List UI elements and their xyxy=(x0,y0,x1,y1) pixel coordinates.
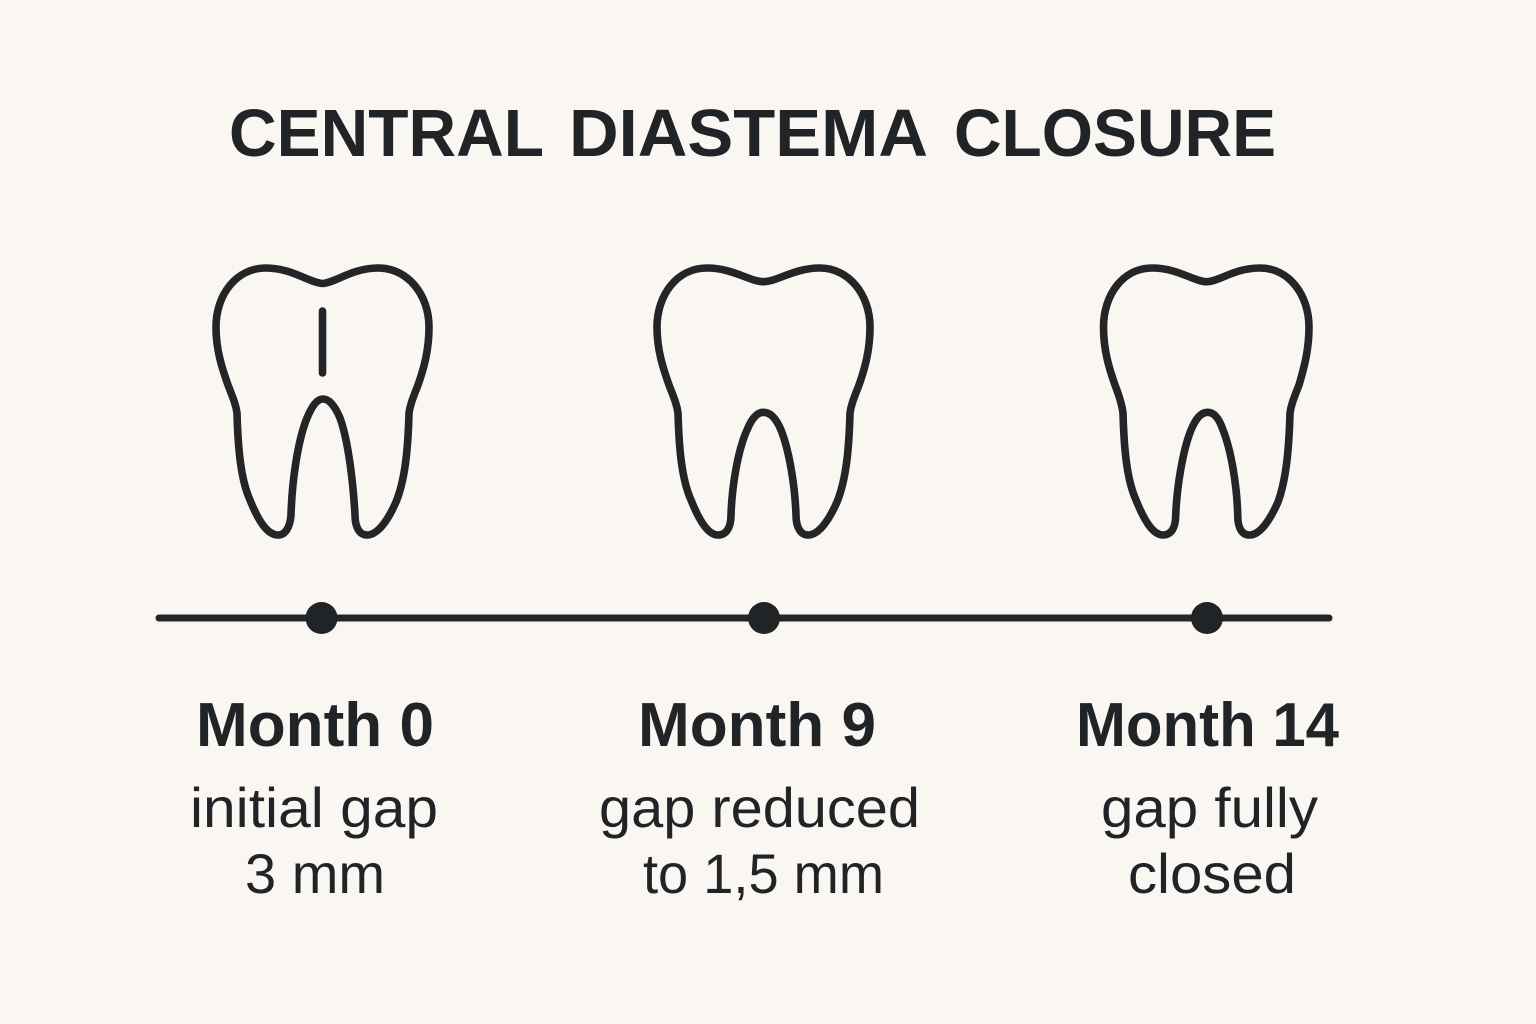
description: 3 mm: 3 mm xyxy=(245,842,385,905)
heading: month 0: Month 0 xyxy=(196,691,434,760)
icon: tooth at month 9 xyxy=(657,268,870,535)
icon: tooth at month 14 xyxy=(1104,268,1309,535)
label block: month 14 xyxy=(1076,691,1339,905)
title xyxy=(229,96,1276,171)
description: to 1,5 mm: to 1,5 mm xyxy=(643,842,884,905)
description: gap fully: gap fully xyxy=(1101,776,1318,839)
heading: month 9: Month 9 xyxy=(638,691,876,760)
title: DIASTEMA xyxy=(569,96,928,171)
title: CENTRAL xyxy=(229,96,544,171)
heading: month 14: Month 14 xyxy=(1076,691,1339,760)
timeline xyxy=(159,602,1329,634)
title: CLOSURE xyxy=(954,96,1276,171)
description: gap reduced: gap reduced xyxy=(599,776,920,839)
label block: month 0 xyxy=(190,691,438,905)
description: closed: closed xyxy=(1128,842,1296,905)
timeline marker: month 0 xyxy=(306,602,338,634)
icon: tooth at month 0 with central gap line xyxy=(216,268,429,535)
label block: month 9 xyxy=(599,691,920,905)
description: initial gap: initial gap xyxy=(190,776,438,839)
timeline marker: month 14 xyxy=(1191,602,1223,634)
timeline marker: month 9 xyxy=(748,602,780,634)
